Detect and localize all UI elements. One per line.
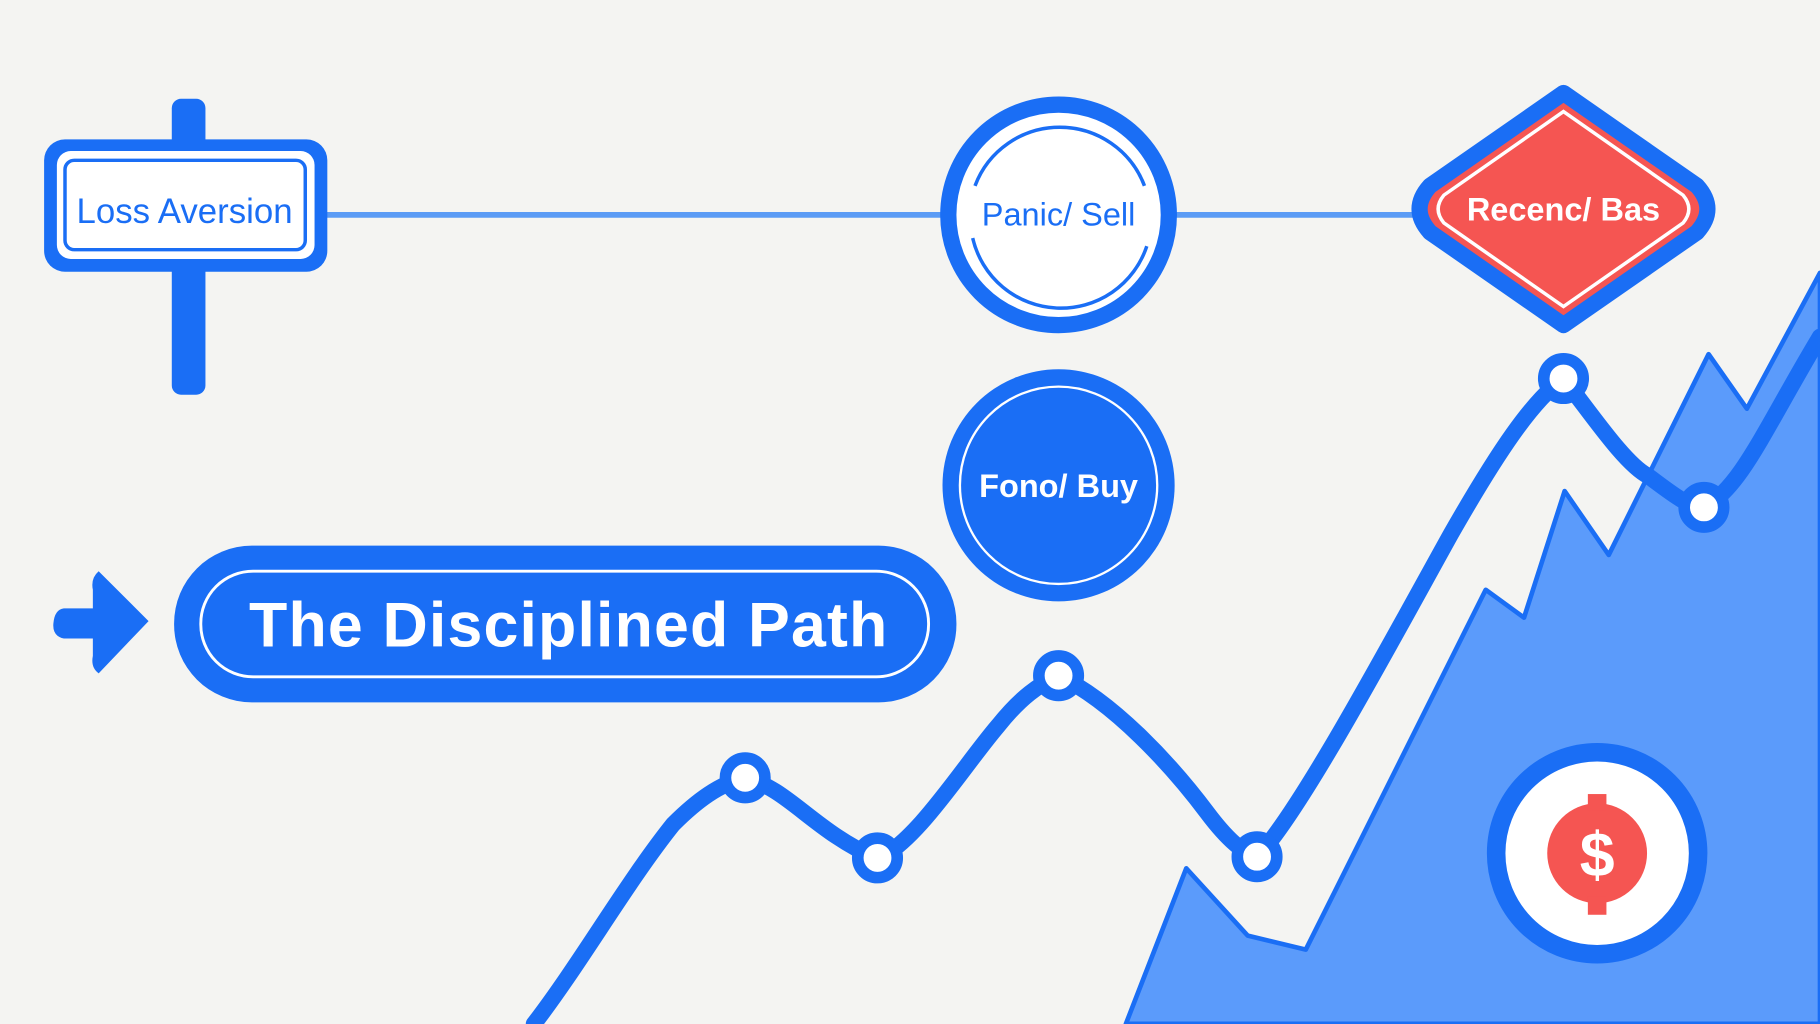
circle: FOMO Buy <box>942 369 1175 601</box>
icon: dollar coin <box>1496 752 1698 954</box>
diamond: Recency Bias: Recenc/ Bas <box>1467 192 1660 228</box>
arrow icon <box>53 571 149 673</box>
circle: Panic Sell: Panic/ Sell <box>982 196 1135 232</box>
signpost: Loss Aversion: Loss Aversion <box>76 192 293 231</box>
diamond: Recency Bias <box>1420 93 1707 325</box>
connector line <box>325 212 1422 217</box>
circle: Panic Sell <box>948 105 1169 325</box>
pill: The Disciplined Path <box>174 546 956 702</box>
icon: dollar coin: $ <box>1580 820 1615 890</box>
signpost: Loss Aversion <box>44 99 327 395</box>
pill: The Disciplined Path: The Disciplined Path <box>249 591 888 661</box>
line chart: disciplined path <box>534 337 1820 1024</box>
circle: FOMO Buy: Fono/ Buy <box>979 468 1138 504</box>
area chart <box>1126 273 1820 1024</box>
